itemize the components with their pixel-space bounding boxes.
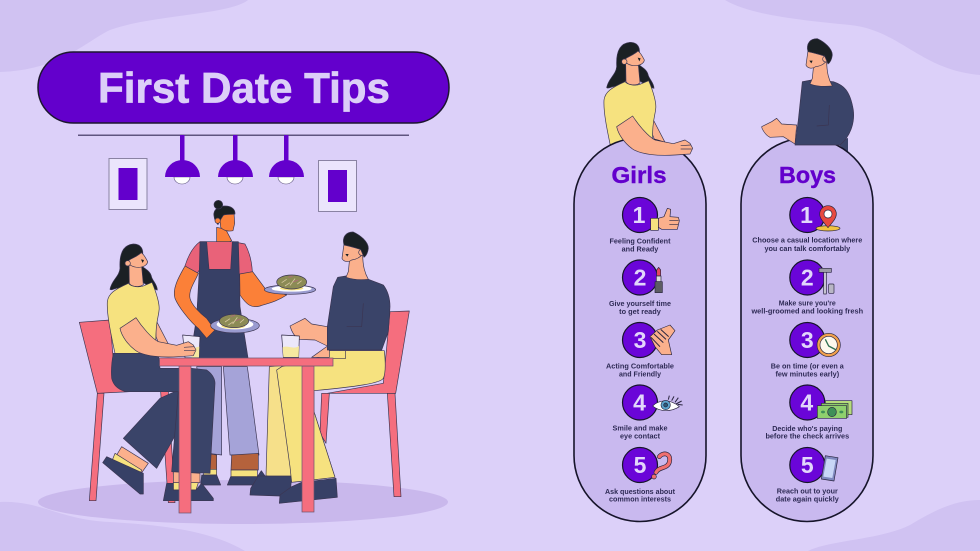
title banner bbox=[38, 52, 449, 123]
tip 4: before the check arrives bbox=[765, 432, 849, 441]
tip 4: eye contact bbox=[620, 432, 660, 441]
tip 1: you can talk comfortably bbox=[764, 244, 851, 253]
tip 3: Be on time (or even a bbox=[771, 361, 845, 370]
icon: question mark bbox=[652, 454, 670, 479]
panel: Boys bbox=[741, 138, 873, 522]
tip 2: well-groomed and looking fresh bbox=[750, 307, 863, 316]
woman portrait above Girls panel, back layer bbox=[604, 42, 665, 152]
tip 4: Decide who's paying bbox=[772, 424, 843, 433]
tip 3 bbox=[606, 322, 675, 379]
tip 3: and Friendly bbox=[619, 370, 662, 379]
background blob: bottom right bbox=[808, 500, 980, 551]
floor shadow bbox=[38, 480, 448, 524]
icon: phone bbox=[821, 456, 838, 481]
wall frame left bbox=[109, 158, 147, 210]
tip 5: date again quickly bbox=[776, 495, 840, 504]
man portrait above Boys panel bbox=[762, 39, 854, 145]
tip 4: 4 bbox=[633, 390, 646, 416]
tip 3: 3 bbox=[801, 327, 814, 353]
tip 4: Smile and make bbox=[612, 424, 668, 433]
tip 5: 5 bbox=[634, 452, 647, 478]
background blob: top left bbox=[0, 0, 248, 72]
background blob: bottom left bbox=[0, 502, 245, 551]
tip 2: to get ready bbox=[619, 307, 662, 316]
ceiling line with lamps bbox=[78, 134, 409, 184]
table bbox=[160, 358, 333, 513]
wall frame right bbox=[318, 160, 356, 212]
lamp 3 bbox=[269, 135, 304, 184]
woman seated body bbox=[103, 244, 259, 501]
man shoulder piece behind Boys panel bbox=[835, 138, 848, 152]
tip 2: 2 bbox=[801, 264, 814, 290]
icon: razor bbox=[819, 268, 834, 294]
man's head bbox=[806, 39, 832, 86]
plate held at waist bbox=[211, 314, 259, 333]
lamp 1 bbox=[165, 135, 200, 184]
tip 3: 3 bbox=[634, 327, 646, 353]
title: First Date Tips bbox=[98, 64, 390, 112]
woman's arm resting on Girls panel bbox=[617, 116, 693, 155]
tip 1: 1 bbox=[800, 202, 813, 228]
tip 3 bbox=[771, 322, 845, 378]
tip 4: 4 bbox=[800, 390, 813, 416]
tip 2: Give yourself time bbox=[609, 299, 671, 308]
tip 5 bbox=[605, 448, 675, 504]
icon: clock bbox=[817, 333, 840, 357]
waiter bbox=[174, 200, 266, 485]
woman's glass bbox=[183, 335, 200, 358]
tip 2 bbox=[609, 260, 671, 316]
tip 4 bbox=[612, 385, 683, 441]
tip 1 bbox=[610, 198, 679, 253]
tip 5: 5 bbox=[801, 452, 814, 478]
tip 4 bbox=[765, 385, 852, 441]
tip 3: Acting Comfortable bbox=[606, 362, 674, 371]
tip 5: common interests bbox=[609, 495, 671, 504]
tip 5: Reach out to your bbox=[777, 487, 838, 496]
panel: Girls bbox=[574, 138, 706, 522]
tip 5: Ask questions about bbox=[605, 487, 675, 496]
icon: cash bbox=[817, 401, 852, 418]
dinner scene illustration bbox=[79, 200, 409, 513]
tip 5 bbox=[776, 448, 840, 504]
waiter plate in right hand and arm bbox=[240, 272, 316, 307]
tip 2: Make sure you're bbox=[779, 299, 836, 308]
tip 1 bbox=[752, 198, 862, 253]
tip 1: Choose a casual location where bbox=[752, 236, 862, 245]
man seated body bbox=[250, 232, 390, 503]
man's chair bbox=[320, 311, 409, 497]
woman's chair bbox=[79, 320, 175, 503]
tip 2: 2 bbox=[634, 264, 646, 290]
icon: lipstick bbox=[655, 267, 662, 293]
man's sweater bbox=[762, 80, 854, 145]
tip 1: and Ready bbox=[622, 244, 659, 253]
icon: handshake bbox=[650, 325, 675, 355]
icon: eye bbox=[653, 396, 683, 411]
tip 1: 1 bbox=[633, 202, 646, 228]
icon: thumbs up bbox=[651, 208, 679, 230]
heading: Girls: Girls bbox=[612, 162, 666, 188]
tip 2 bbox=[750, 260, 863, 316]
tip 3: few minutes early) bbox=[775, 369, 840, 378]
icon: location pin bbox=[816, 206, 840, 231]
tip 1: Feeling Confident bbox=[610, 237, 671, 246]
background blob: top right bbox=[725, 0, 980, 75]
heading: Boys: Boys bbox=[779, 162, 836, 188]
lamp 2 bbox=[218, 135, 253, 184]
man's glass bbox=[282, 335, 299, 357]
